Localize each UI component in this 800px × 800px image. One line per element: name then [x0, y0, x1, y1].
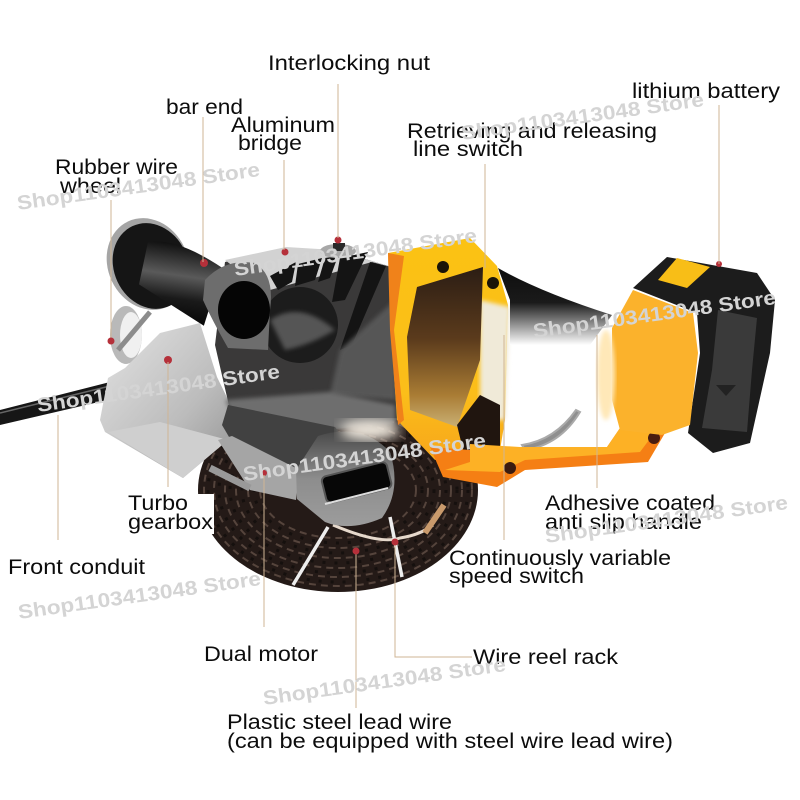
watermarks: Shop1103413048 Store [17, 568, 262, 624]
wire markers [108, 338, 398, 554]
bar end handle [92, 204, 225, 327]
label: interlocking nut: Interlocking nut [268, 52, 430, 75]
label: aluminum bridge [231, 114, 335, 155]
label: retrieving and releasing line switch [407, 120, 657, 161]
label: turbo gearbox: Turbo [128, 492, 188, 515]
label: retrieving and releasing line switch: Retrieving and releasing [407, 120, 657, 143]
lithium battery [633, 257, 775, 453]
interlocking nut [320, 236, 356, 258]
label: continuously variable speed switch [449, 547, 671, 588]
wire spool [198, 388, 478, 592]
gearbox wire clamp [210, 468, 250, 488]
watermarks: Shop1103413048 Store [233, 225, 478, 281]
label: retrieving and releasing line switch: line switch [413, 138, 523, 161]
dual motor cylinder [218, 405, 394, 526]
label: rubber wire wheel: Rubber wire [55, 156, 178, 179]
label: adhesive coated anti slip handle: Adhesive coated [545, 492, 715, 515]
aluminum bridge marker [282, 248, 288, 256]
motor housing body [215, 247, 398, 430]
label: plastic steel lead wire [227, 711, 673, 753]
label: lithium battery: lithium battery [632, 80, 781, 103]
watermarks [16, 89, 789, 710]
watermarks: Shop1103413048 Store [262, 654, 507, 710]
label: adhesive coated anti slip handle [545, 492, 715, 534]
front tube [203, 262, 271, 350]
label: plastic steel lead wire: (can be equipped with steel wire lead wire) [227, 730, 673, 753]
label: plastic steel lead wire: Plastic steel lead wire [227, 711, 452, 734]
label: aluminum bridge: Aluminum [231, 114, 335, 137]
watermarks: Shop1103413048 Store [16, 159, 261, 215]
label: continuously variable speed switch: Continuously variable [449, 547, 671, 570]
watermarks: Shop1103413048 Store [544, 492, 789, 548]
trigger wire [522, 410, 580, 450]
grip housing [597, 290, 698, 435]
label: wire reel rack: Wire reel rack [473, 646, 619, 669]
label: turbo gearbox [128, 492, 214, 534]
rubber wire wheel [110, 306, 150, 364]
label: dual motor: Dual motor [204, 643, 318, 666]
front conduit [0, 382, 116, 425]
label: rubber wire wheel [55, 156, 178, 198]
label: adhesive coated anti slip handle: anti slip handle [545, 511, 702, 534]
neck of the handle [498, 268, 612, 345]
yellow head frame [388, 238, 510, 460]
watermarks: Shop1103413048 Store [532, 287, 777, 343]
turbo gearbox [100, 323, 238, 478]
glow between head and body [340, 420, 400, 440]
label: turbo gearbox: gearbox [128, 511, 214, 534]
anti slip handle [430, 428, 665, 487]
label: aluminum bridge: bridge [238, 132, 302, 155]
watermarks: Shop1103413048 Store [460, 89, 705, 145]
label: continuously variable speed switch: speed switch [449, 565, 584, 588]
label: rubber wire wheel: wheel [59, 175, 121, 198]
watermarks: Shop1103413048 Store [242, 430, 487, 486]
leader lines [58, 84, 719, 708]
label: bar end: bar end [166, 96, 243, 119]
watermarks: Shop1103413048 Store [36, 361, 281, 417]
label: front conduit: Front conduit [8, 556, 145, 579]
